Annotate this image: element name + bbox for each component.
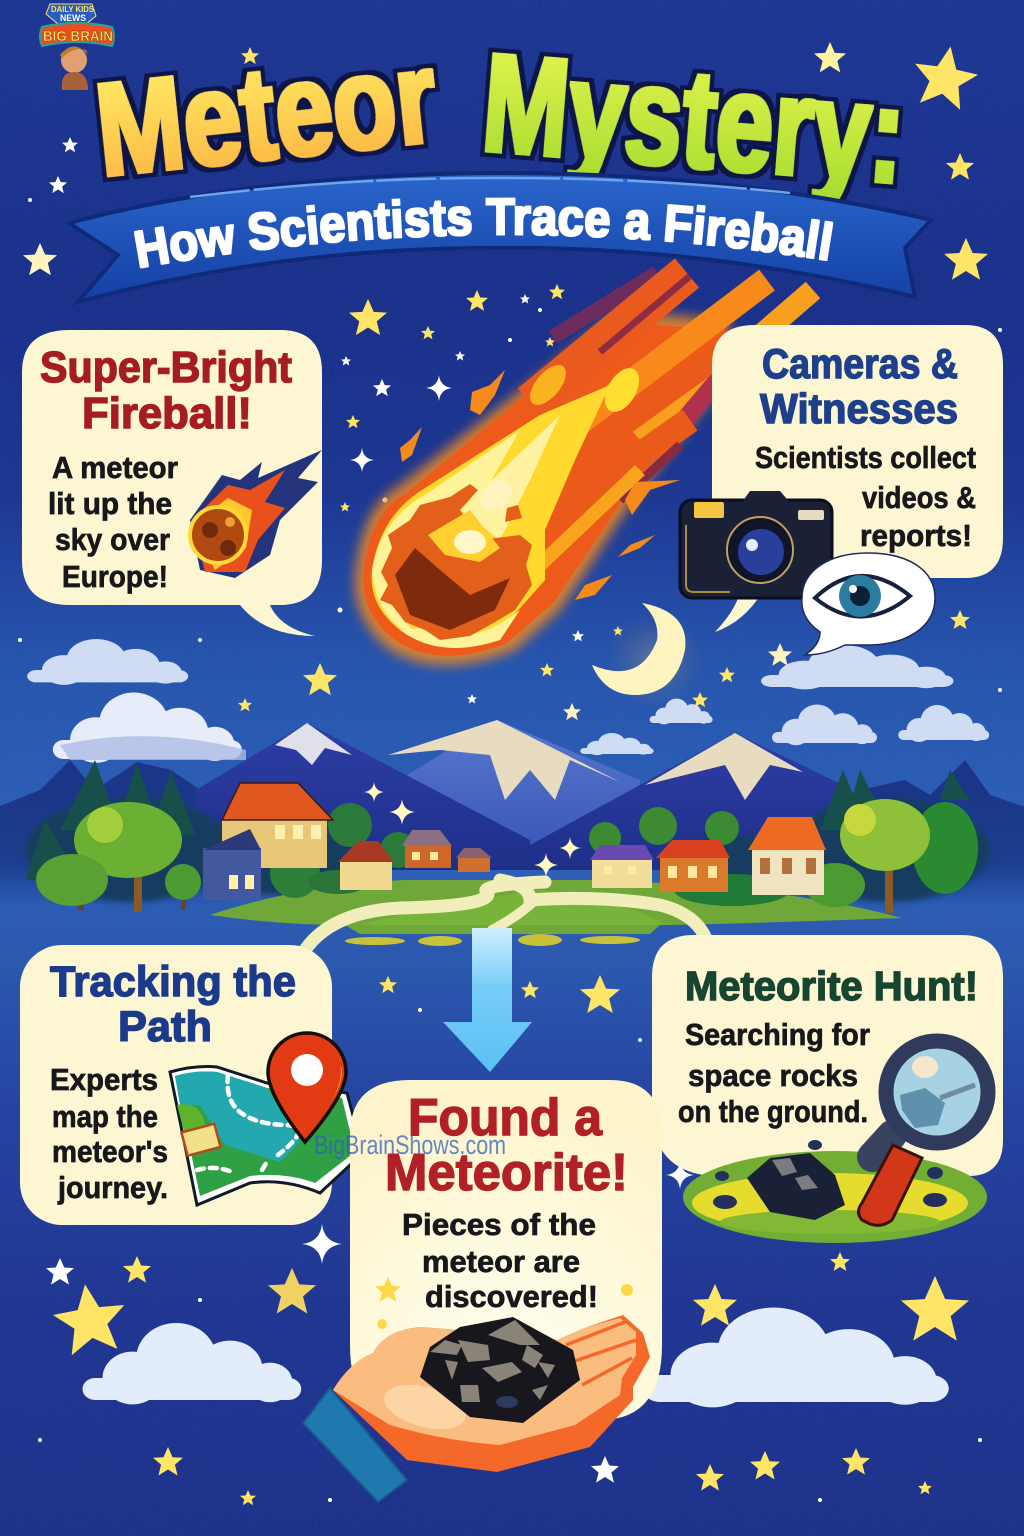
logo: Daily Kids News Big Brain xyxy=(40,4,114,90)
panel: found a meteorite: Pieces of the xyxy=(402,1207,596,1242)
trees left xyxy=(36,802,416,912)
panel: meteorite hunt: Searching for xyxy=(685,1017,870,1052)
panel: found a meteorite: Meteorite! xyxy=(385,1144,628,1202)
panel: found a meteorite: Found a xyxy=(408,1089,603,1147)
panel: tracking the path: journey. xyxy=(57,1170,168,1205)
clouds: bottom xyxy=(82,1308,949,1407)
banner: subtitle ribbon xyxy=(64,171,934,306)
forest hills xyxy=(0,760,1024,905)
icon: meteorite rock xyxy=(420,1317,580,1423)
panel: cameras and witnesses: Witnesses xyxy=(760,385,958,432)
icon: small fireball xyxy=(190,450,322,578)
panel: cameras and witnesses: reports! xyxy=(860,518,972,553)
logo: Daily Kids News Big Brain: BIG BRAIN xyxy=(43,28,113,45)
panel: super-bright fireball: Fireball! xyxy=(82,389,252,438)
arrow: down to found meteorite xyxy=(443,928,532,1072)
title: Meteor Mystery: Meteor xyxy=(90,22,443,204)
title: Meteor Mystery xyxy=(90,22,911,213)
clouds: mid sky xyxy=(27,639,989,763)
houses xyxy=(203,783,826,900)
panel: super-bright fireball: Europe! xyxy=(62,559,168,594)
panel: meteorite hunt xyxy=(652,935,1003,1243)
icon: camera xyxy=(680,491,832,598)
panel: cameras and witnesses xyxy=(680,325,1003,655)
pines xyxy=(25,760,970,880)
logo: Daily Kids News Big Brain: NEWS xyxy=(60,13,86,23)
panel: found a meteorite xyxy=(350,1080,662,1420)
panel: tracking the path xyxy=(20,945,332,1225)
icon: hand holding meteorite xyxy=(303,1315,650,1502)
flying sparks xyxy=(400,370,680,600)
fireball: large meteor with tail xyxy=(355,273,813,665)
panel: tracking the path: Experts xyxy=(50,1062,158,1097)
panel: super-bright fireball: A meteor xyxy=(52,450,178,485)
moon xyxy=(592,603,705,710)
panel: cameras and witnesses: videos & xyxy=(862,480,976,515)
panel: cameras and witnesses: Scientists collect xyxy=(755,440,976,475)
meadow xyxy=(210,880,902,946)
road xyxy=(300,880,708,958)
logo: Daily Kids News Big Brain: DAILY KIDS xyxy=(51,5,95,14)
icon: magnifying glass xyxy=(858,1041,988,1225)
panel: found a meteorite: meteor are xyxy=(422,1244,580,1279)
panel: meteorite hunt: Meteorite Hunt! xyxy=(685,963,978,1009)
panel: tracking the path: meteor's xyxy=(52,1134,168,1169)
panel: tracking the path: Tracking the xyxy=(50,958,296,1006)
panel: super-bright fireball: Super-Bright xyxy=(40,343,292,392)
panel: super-bright fireball: lit up the xyxy=(48,486,172,521)
panel: meteorite hunt: on the ground. xyxy=(678,1094,868,1129)
dark tree mass xyxy=(25,798,990,902)
icon: eye speech bubble xyxy=(802,553,935,655)
panel: super-bright fireball xyxy=(22,330,322,636)
panel: meteorite hunt: space rocks xyxy=(688,1058,858,1093)
landscape: mountains, village, trees, meadow xyxy=(0,720,1024,958)
icon: map with pin xyxy=(170,1033,363,1205)
panel: tracking the path: Path xyxy=(118,1003,212,1051)
panel: tracking the path: map the xyxy=(52,1099,158,1134)
panel: super-bright fireball: sky over xyxy=(55,522,170,557)
icon: location pin xyxy=(268,1033,346,1142)
icon: grass patch with rock xyxy=(683,1140,987,1243)
mountains xyxy=(196,720,843,870)
panel: cameras and witnesses: Cameras & xyxy=(762,340,958,387)
banner: subtitle ribbon: How Scientists Trace a Fireball xyxy=(134,198,834,268)
panel: found a meteorite: discovered! xyxy=(425,1279,598,1314)
sparkles xyxy=(364,782,581,877)
watermark: BigBrainShows.com: BigBrainShows.com xyxy=(314,1130,506,1160)
trees right xyxy=(589,799,978,913)
